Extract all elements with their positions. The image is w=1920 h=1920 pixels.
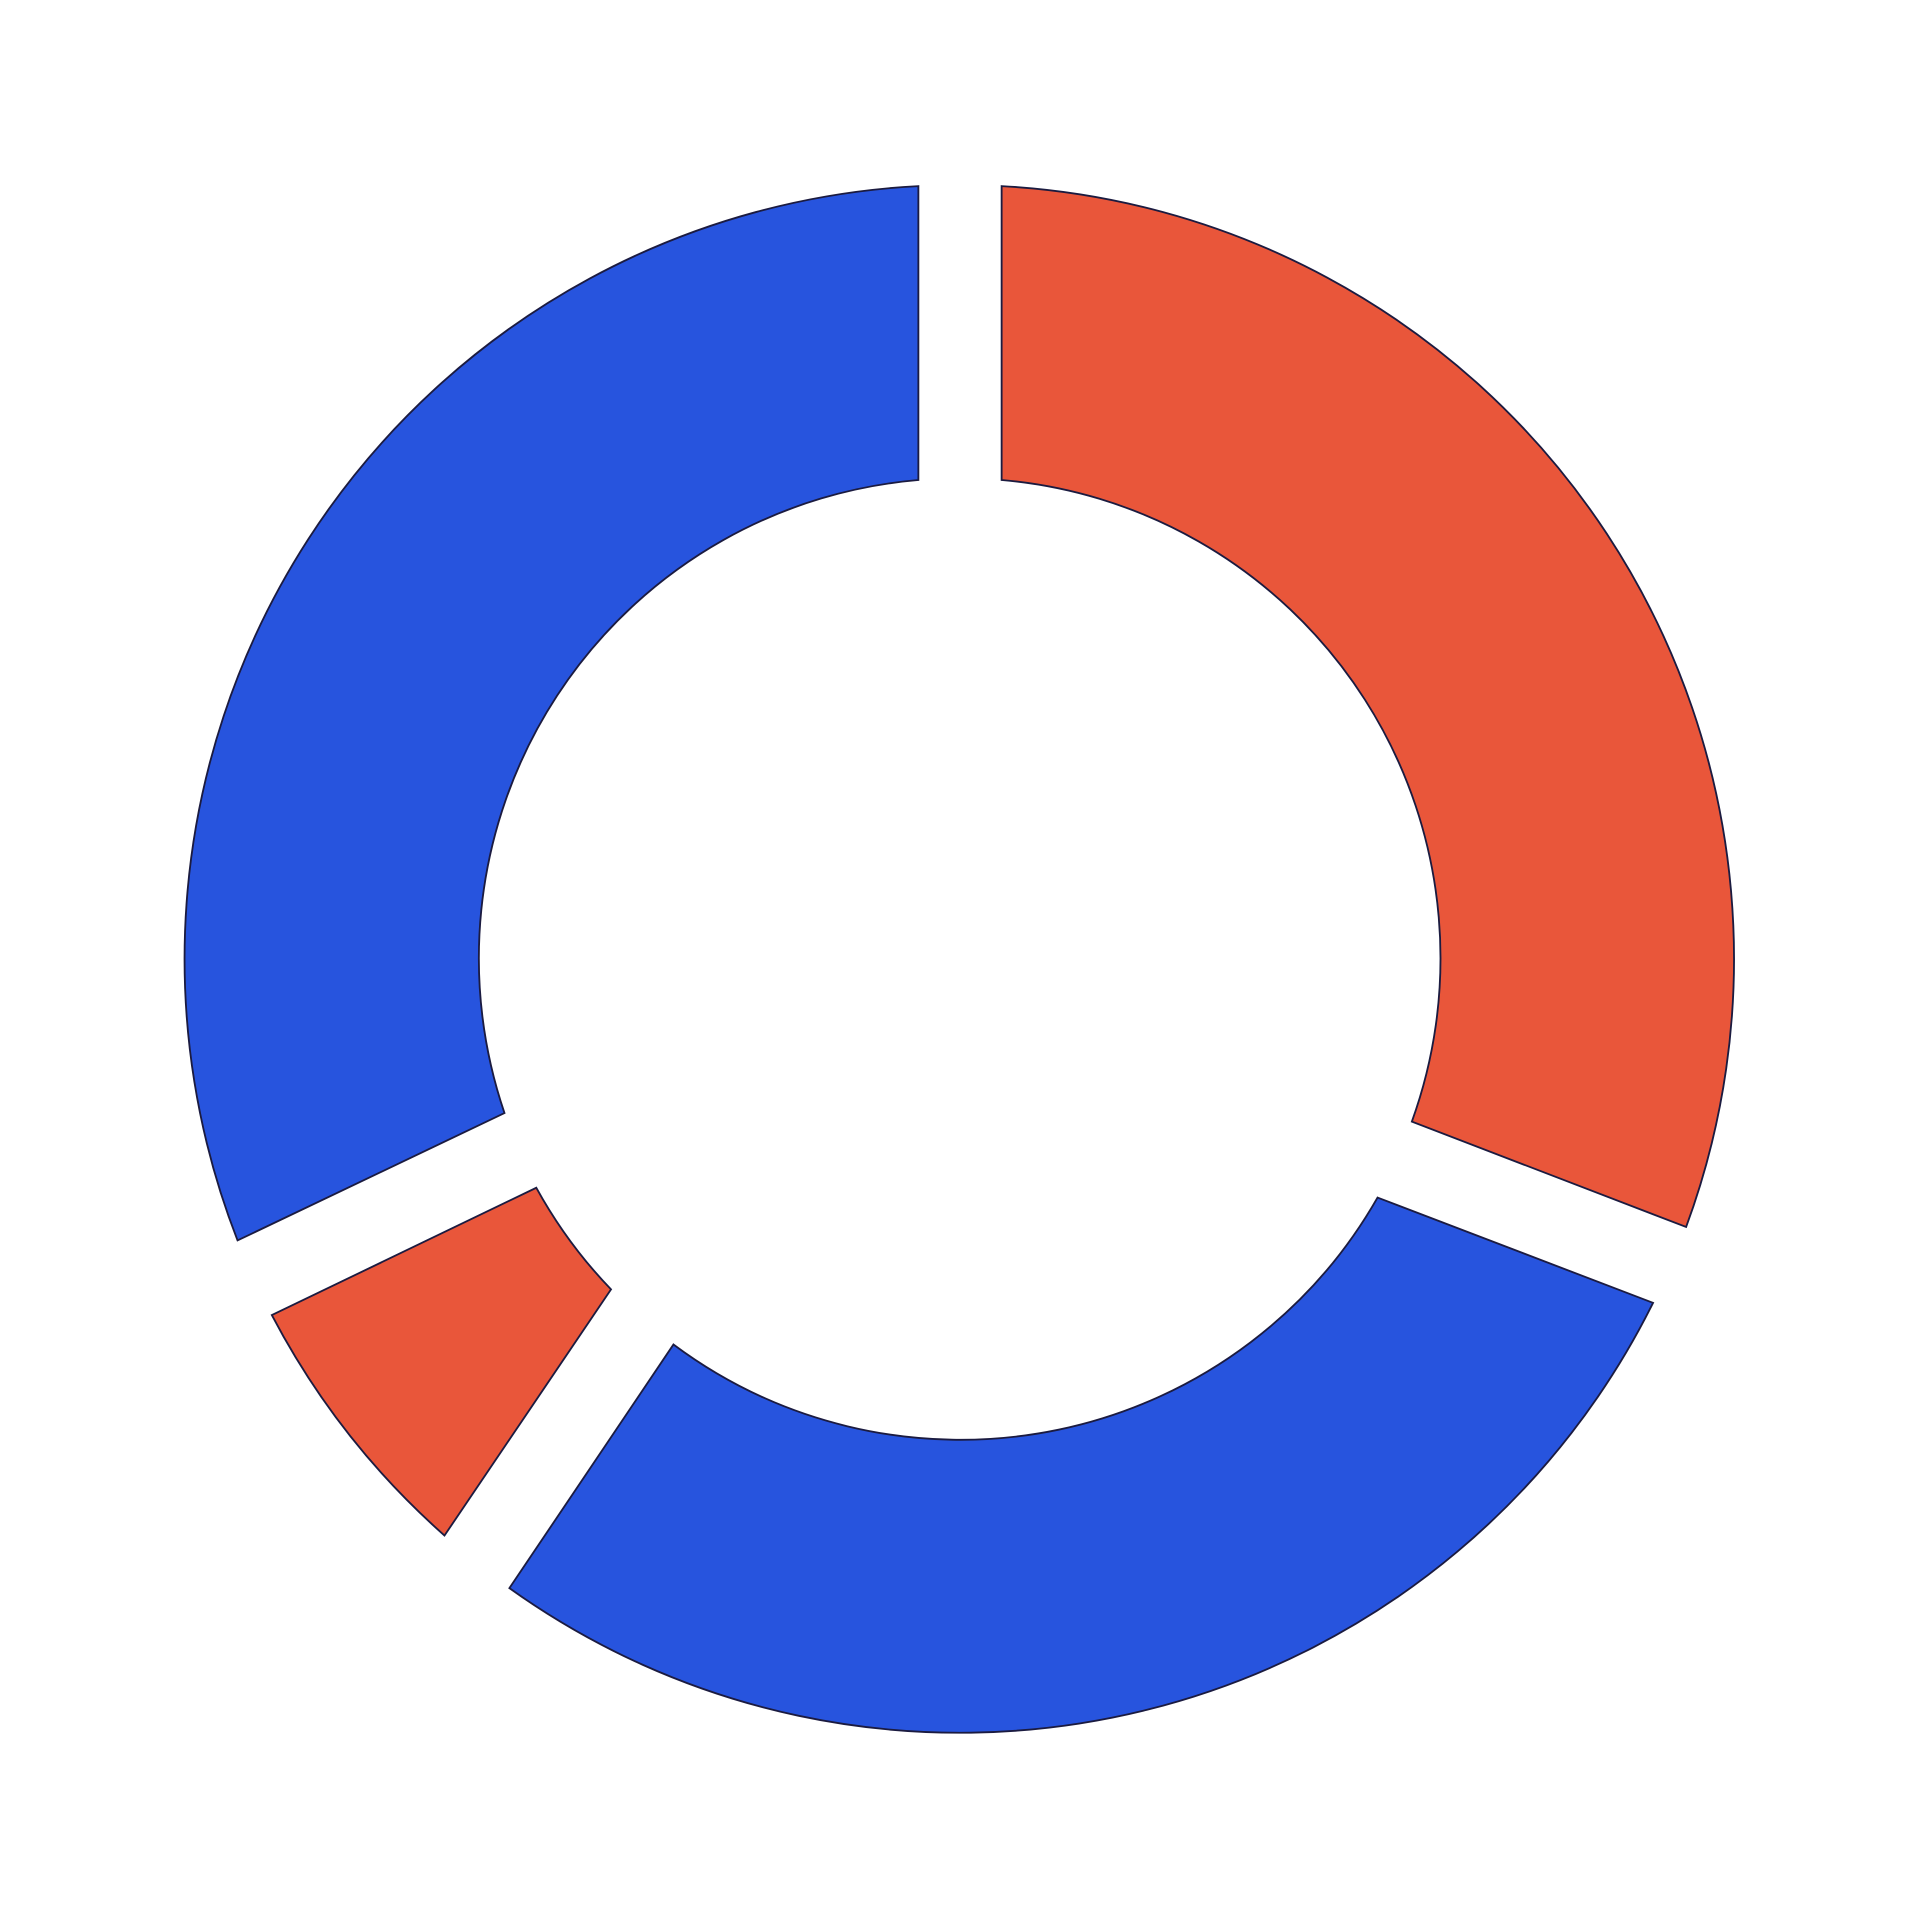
segment: orange small lower-left: [272, 1188, 611, 1536]
segment: blue bottom: [509, 1198, 1653, 1733]
segment: orange right: [1002, 186, 1734, 1227]
segment: blue upper-left: [185, 186, 918, 1240]
